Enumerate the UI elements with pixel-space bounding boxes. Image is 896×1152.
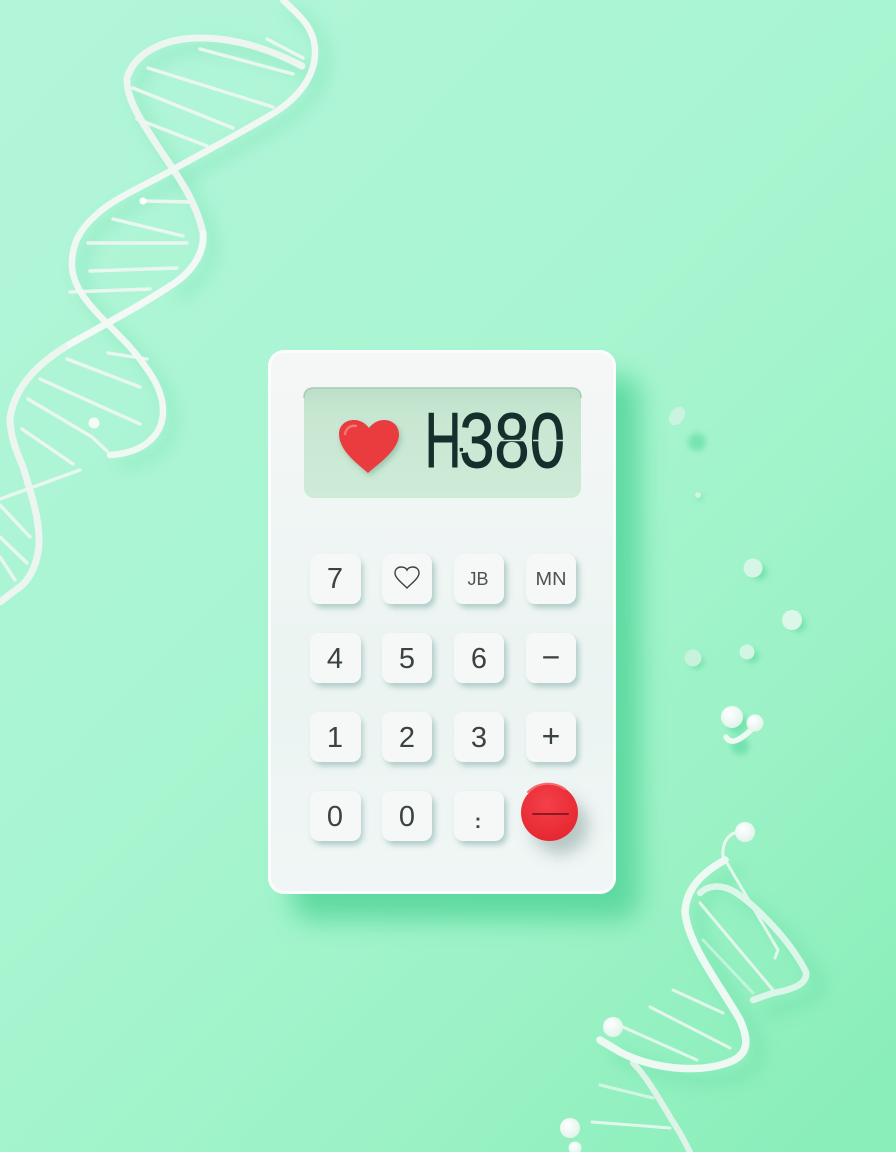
- key: 6: [454, 633, 504, 683]
- calculator shadow: [292, 376, 640, 920]
- key: 5: 5: [399, 643, 415, 675]
- key: 1: [310, 712, 361, 762]
- DNA helix: bottom right: [560, 822, 822, 1152]
- red button: [521, 784, 588, 854]
- key: 0 left: 0: [327, 801, 343, 833]
- key: MN: [526, 554, 576, 604]
- calculator: [268, 350, 616, 894]
- strand: main ribbon: [72, 0, 315, 455]
- digital readout: 8: [494, 398, 530, 485]
- strand: crossing on top: [70, 233, 203, 344]
- key: 3: 3: [471, 722, 487, 754]
- key: 0 middle: 0: [399, 801, 415, 833]
- key: colon: :: [475, 811, 481, 833]
- key: 4: 4: [327, 643, 343, 675]
- key: 3: [454, 712, 504, 762]
- molecule: [721, 706, 764, 741]
- display screen: [304, 388, 581, 498]
- key: 6: 6: [471, 643, 487, 675]
- back strand: [700, 886, 806, 1000]
- key: plus: [526, 712, 576, 762]
- key: 7: 7: [327, 563, 343, 595]
- DNA helix: top left: [0, 0, 325, 602]
- digital readout: 0: [530, 398, 565, 485]
- floating particles: [666, 404, 806, 755]
- key: 5: [382, 633, 432, 683]
- key: minus: −: [542, 639, 560, 675]
- key: 4: [310, 633, 361, 683]
- digital readout: ·: [458, 437, 466, 464]
- key: 1: 1: [327, 722, 343, 754]
- key: 2: 2: [399, 722, 415, 754]
- strand: upper loop: [0, 38, 302, 602]
- key: 2: [382, 712, 432, 762]
- keypad: [310, 554, 588, 854]
- key shadows: [313, 558, 579, 845]
- key: minus: [526, 633, 576, 683]
- calculator body: [268, 350, 616, 894]
- digital readout: [425, 396, 565, 485]
- key: JB: JB: [468, 569, 488, 589]
- key: JB: [454, 554, 504, 604]
- icon: red heart: [339, 420, 401, 476]
- key: 0 left: [310, 791, 361, 841]
- key: 7: [310, 554, 361, 604]
- key: heart outline: [382, 554, 432, 604]
- key: 0 middle: [382, 791, 432, 841]
- key: plus: +: [542, 718, 560, 754]
- key: colon: [454, 791, 504, 841]
- digital readout: H: [425, 396, 461, 484]
- front strand: [600, 860, 746, 1069]
- key: MN: MN: [536, 569, 566, 589]
- digital readout: 3: [459, 398, 495, 485]
